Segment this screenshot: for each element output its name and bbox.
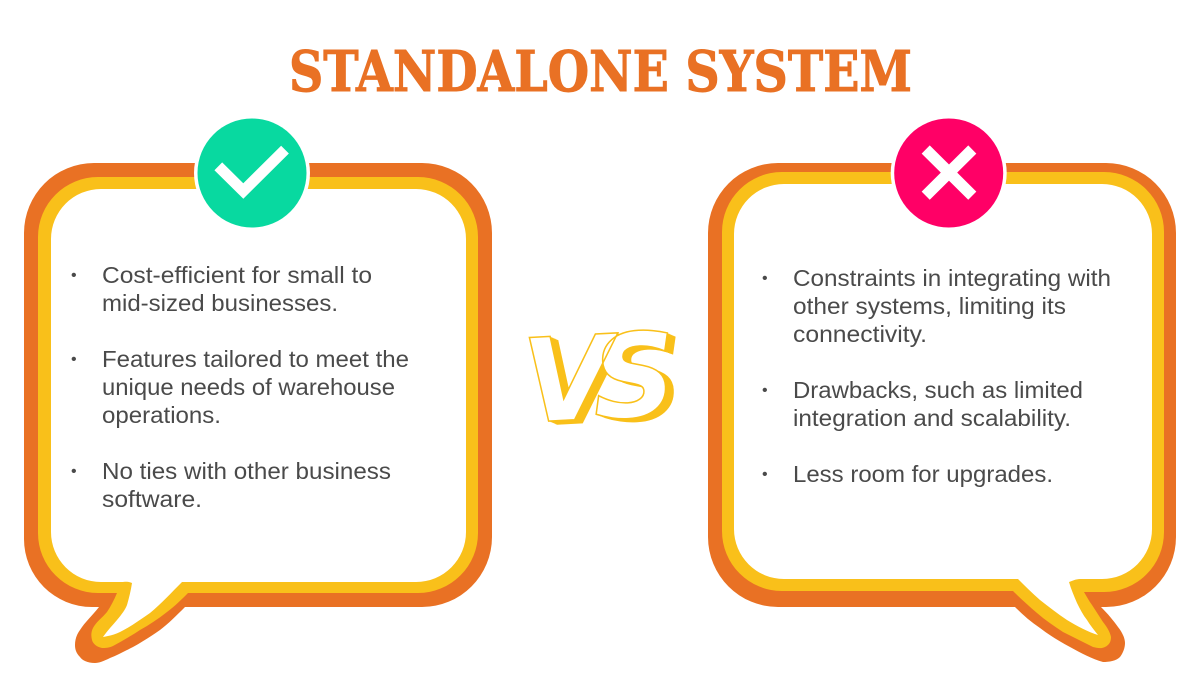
bullet list: pros: unique needs of warehouse — [102, 374, 395, 400]
bullet list: pros: • — [71, 267, 77, 284]
bullet list: cons: • — [762, 466, 768, 483]
bullet list: cons: integration and scalability. — [793, 405, 1071, 431]
bullet list: pros: • — [71, 463, 77, 480]
bullet list: pros: Cost-efficient for small to — [102, 262, 372, 288]
title: STANDALONE SYSTEM — [289, 39, 912, 105]
bullet list: cons: • — [762, 382, 768, 399]
bullet list: cons: Less room for upgrades. — [793, 461, 1053, 487]
bullet list: cons — [762, 265, 1111, 487]
bullet list: pros: mid-sized businesses. — [102, 290, 338, 316]
bullet list: pros: operations. — [102, 402, 221, 428]
bullet list: pros — [71, 262, 409, 512]
bullet list: pros: Features tailored to meet the — [102, 346, 409, 372]
icon: green check badge — [194, 115, 310, 231]
bullet list: pros: • — [71, 351, 77, 368]
bullet list: cons: other systems, limiting its — [793, 293, 1066, 319]
icon: pink cross badge — [891, 115, 1007, 231]
VS emblem: VS — [519, 309, 660, 450]
panel: cons speech bubble — [708, 163, 1176, 662]
bullet list: cons: Constraints in integrating with — [793, 265, 1111, 291]
bullet list: cons: connectivity. — [793, 321, 927, 347]
bullet list: pros: No ties with other business — [102, 458, 391, 484]
bullet list: pros: software. — [102, 486, 202, 512]
panel: pros speech bubble — [24, 163, 492, 663]
bullet list: cons: • — [762, 270, 768, 287]
bullet list: cons: Drawbacks, such as limited — [793, 377, 1083, 403]
